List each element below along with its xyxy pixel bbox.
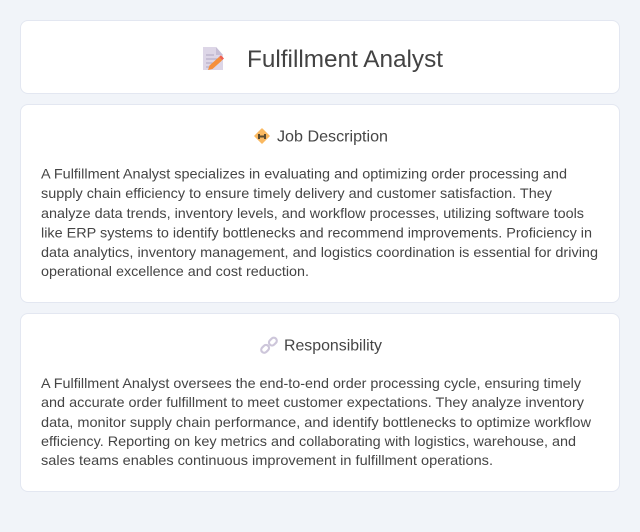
job description text: data analytics, inventory management, and logistics coordination is essential for driving xyxy=(41,244,598,260)
heading: job description: Job Description xyxy=(277,128,388,146)
job description text: analyze data trends, inventory levels, and workflow processes, utilizing software tools xyxy=(41,205,584,221)
job description text: A Fulfillment Analyst specializes in evaluating and optimizing order processing and xyxy=(41,166,567,182)
responsibility text: data, monitor supply chain performance, and identify bottlenecks to optimize workflow xyxy=(41,414,592,430)
responsibility text: A Fulfillment Analyst oversees the end-to-end order processing cycle, ensuring timely xyxy=(41,375,581,391)
responsibility text: efficiency. Reporting on key metrics and collaborating with logistics, warehouse, and xyxy=(41,433,576,449)
icon: chain link xyxy=(260,336,278,354)
panel: responsibility card xyxy=(20,313,620,492)
title: Fulfillment Analyst xyxy=(247,46,443,73)
job description text: like ERP systems to identify bottlenecks and recommend improvements. Proficiency in xyxy=(41,224,592,240)
responsibility text: sales teams enables continuous improvement in fulfillment operations. xyxy=(41,452,493,468)
panel: job description card xyxy=(20,104,620,303)
icon: orange diamond sign xyxy=(255,129,269,143)
responsibility text xyxy=(41,375,592,468)
job description text: operational excellence and cost reduction. xyxy=(41,263,309,279)
panel: title card xyxy=(20,20,620,94)
heading: responsibility: Responsibility xyxy=(284,338,382,354)
job description text: supply chain efficiency to ensure timely delivery and customer satisfaction. They xyxy=(41,185,552,201)
job description text xyxy=(41,166,598,279)
icon: document with pencil xyxy=(203,47,224,70)
responsibility text: and accurate order fulfillment to meet customer expectations. They analyze inventory xyxy=(41,394,584,410)
